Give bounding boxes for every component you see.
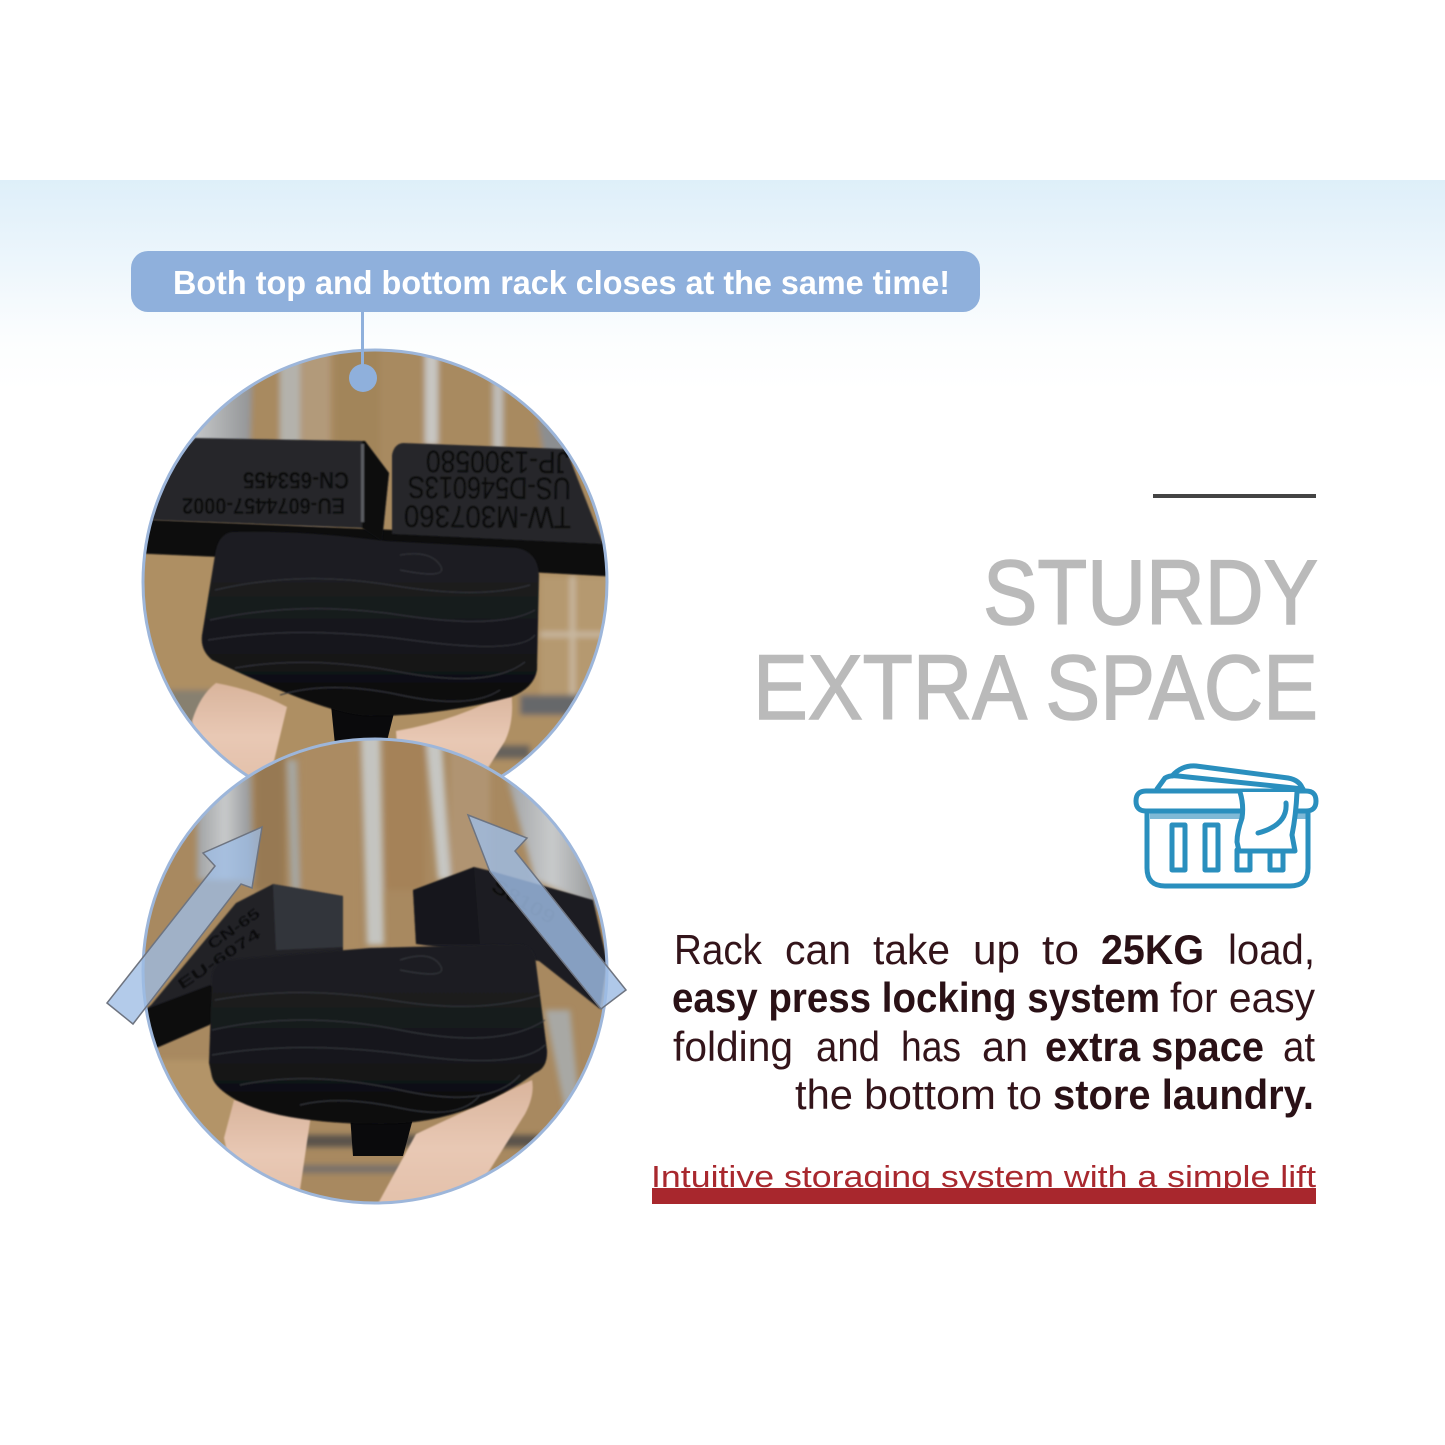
body text: 25KG [1101,926,1204,973]
body text: up [973,926,1020,973]
title: STURDY [983,542,1318,644]
rack block right [392,443,603,544]
body text: to [1042,926,1079,973]
rack block right: TW-M307360 [404,499,571,535]
body text: take [873,926,950,973]
title [753,542,1318,739]
body text: bottom [864,1071,996,1118]
body text: to [1007,1071,1042,1118]
arrow: left, pointing up [107,827,262,1024]
rack block left: EU-6074457-0002 [182,493,345,519]
body text: at [1283,1023,1315,1070]
stem [350,1121,412,1156]
background gradient band [0,180,1445,390]
body text: can [785,926,851,973]
body text: an [982,1023,1028,1070]
rack block right: S8109 [488,875,559,929]
body text: the [795,1071,853,1118]
callout: top and bottom rack: Both top and bottom rack closes at the same time! [173,264,950,301]
callout: top and bottom rack [131,251,980,312]
fingers [224,1080,533,1216]
body text [672,926,1315,1118]
body text: has [901,1023,961,1070]
photo circle: rack closed [142,348,608,776]
body text: load, [1228,926,1315,973]
body text: easy press locking system [672,974,1160,1021]
photo circle: rack folding with arrows [130,730,607,1216]
rack block right [413,867,607,1009]
connector line and dot [349,312,377,392]
rack block left [150,438,389,541]
stem [331,708,394,741]
black rack bar [130,519,620,577]
caption with red bar: Intuitive storaging system with a simple lift [651,1159,1316,1194]
title: EXTRA SPACE [753,637,1318,739]
body text: and [816,1023,880,1070]
icon: laundry basket [1136,766,1316,886]
body text: extra space [1045,1023,1264,1070]
rack block left [146,884,343,1049]
rack block left: CN-65 [205,905,263,953]
heading rule [1153,494,1316,498]
rack block left: EU-6074 [175,925,265,993]
rack block left: CN-653455 [243,466,349,493]
arrow: right, pointing up [468,815,626,1009]
body text: store laundry. [1053,1071,1314,1118]
locking pad [202,532,539,716]
caption with red bar [652,1165,1316,1204]
fingers [191,682,513,774]
body text: folding [673,1023,793,1070]
rack block right: US-D546013S [408,470,571,506]
body text: Rack [674,926,763,973]
body text: for easy [1170,974,1315,1021]
rack block right: JP-1300580 [426,444,569,480]
locking pad [209,944,547,1124]
